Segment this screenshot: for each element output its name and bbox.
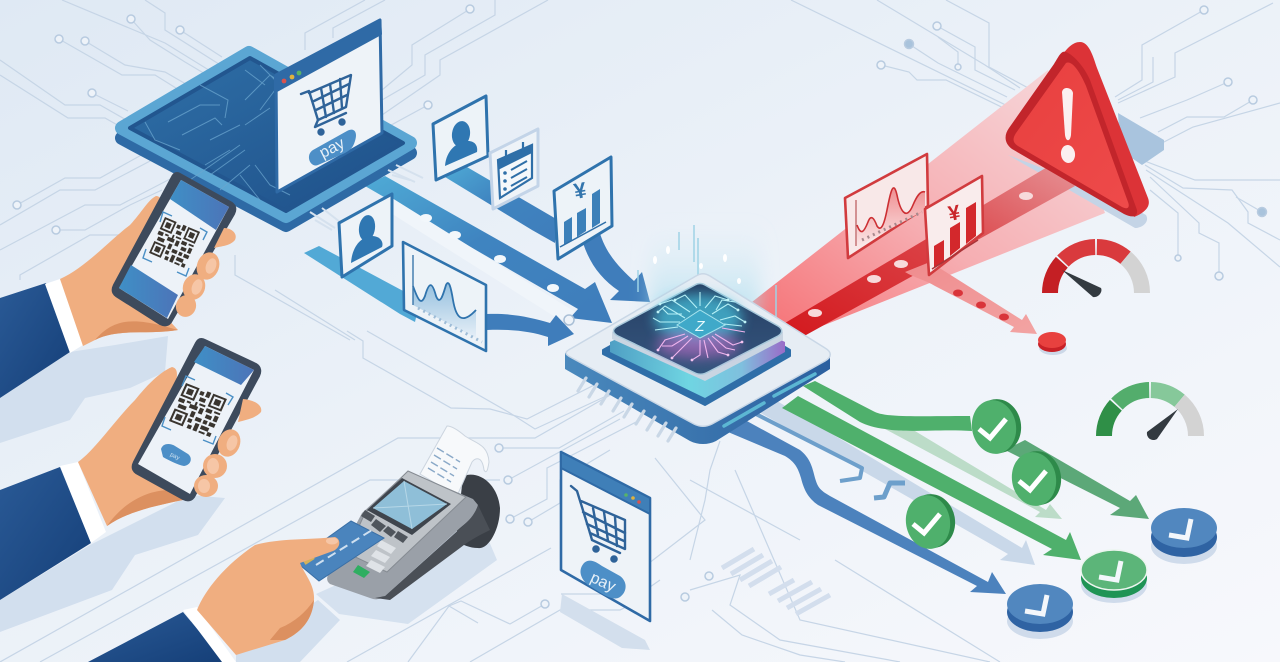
- top face: [614, 284, 782, 374]
- QR code: [169, 383, 227, 437]
- chip base: [565, 353, 830, 444]
- data platform: [122, 53, 410, 225]
- check badge upper: [968, 395, 1025, 457]
- cuff: [183, 607, 236, 662]
- sleeve: [0, 283, 70, 398]
- red chart card: [845, 154, 928, 258]
- finger: middle: [214, 426, 244, 460]
- button: pay: pay: [317, 135, 348, 162]
- AI chip: [565, 225, 830, 444]
- QR code: [149, 217, 200, 268]
- scan corners: [143, 212, 207, 276]
- icon card: person upper: [433, 96, 488, 180]
- core square: [677, 310, 725, 338]
- screen: [373, 481, 447, 529]
- pins: [578, 378, 676, 441]
- side slots: [724, 374, 815, 426]
- icon card: yen bar chart: [554, 157, 612, 259]
- green path lower: [782, 396, 1081, 560]
- red speed gauge: [1042, 239, 1150, 297]
- pale blue path: [752, 398, 1035, 565]
- hatch stripes: [722, 549, 830, 614]
- green speed gauge: [1096, 382, 1204, 440]
- icon card: yen bar chart: ¥: [572, 177, 589, 204]
- warning triangle: [1006, 42, 1149, 217]
- red main band: [785, 163, 1075, 340]
- needle: [1062, 270, 1101, 297]
- finger: little: [173, 292, 199, 320]
- blue path: [728, 420, 1006, 594]
- stream: main band with dots: [365, 176, 612, 325]
- red risk beam: [752, 70, 1105, 340]
- red yen card: [925, 176, 983, 275]
- sleeve: [0, 467, 91, 600]
- POS shadow: [316, 520, 497, 624]
- squiggle: [874, 483, 905, 498]
- button: small pay: [161, 444, 191, 466]
- receipt: [420, 426, 489, 496]
- connector pins: [310, 165, 423, 230]
- exclamation mark: [1060, 88, 1076, 164]
- screen frame: [367, 478, 451, 535]
- glow column: [650, 225, 760, 315]
- button: pay: [309, 130, 356, 165]
- green key: [353, 565, 370, 578]
- red yen card: ¥: [947, 201, 962, 226]
- finger: ring: [179, 271, 209, 303]
- hand with card: [88, 537, 339, 662]
- paper roll housing: [456, 475, 500, 548]
- thin blue trace: [750, 411, 862, 481]
- cuff: [45, 279, 83, 353]
- button: small pay: pay: [169, 452, 180, 462]
- bank card: [295, 521, 384, 581]
- palm: [78, 367, 192, 526]
- triangle shadow: [1008, 155, 1147, 228]
- puck: blue right: [1151, 508, 1217, 564]
- chart card: line chart: [403, 242, 486, 351]
- neural glow: [654, 294, 742, 342]
- phone: [133, 339, 260, 500]
- AI chip: Z: [694, 318, 705, 335]
- needle: [1147, 409, 1178, 440]
- hand holding phone lower: [0, 339, 261, 600]
- stream: lower band: [304, 246, 574, 346]
- recess: [603, 296, 790, 405]
- icon card: person lower: [339, 194, 392, 277]
- finger: little: [194, 475, 218, 497]
- POS terminal: [327, 426, 500, 600]
- icon: cart: [571, 486, 625, 562]
- finger: middle: [193, 249, 223, 283]
- puck: blue left: [1007, 584, 1073, 639]
- body: [327, 471, 478, 599]
- sleeve: [88, 612, 225, 662]
- palm: [197, 537, 339, 655]
- glowing band: [610, 300, 785, 398]
- outgoing blue and green paths: [728, 381, 1149, 594]
- scan corners: [162, 376, 233, 444]
- keypad: [361, 510, 408, 543]
- red branch arrow and puck: [905, 262, 1067, 355]
- icon: cart: [301, 75, 351, 134]
- green path upper: [803, 381, 972, 431]
- button: pay: [581, 561, 626, 598]
- platform traces: [145, 65, 290, 200]
- button: pay: pay: [588, 569, 618, 596]
- finger: ring: [203, 454, 227, 478]
- phone: [113, 173, 235, 325]
- puck: green: [1081, 550, 1147, 603]
- pale green path: [885, 425, 1062, 519]
- silver lip: [612, 290, 783, 381]
- window: cart and pay lower: [560, 452, 650, 650]
- cuff: [60, 462, 106, 543]
- icon card: calendar: [490, 129, 538, 209]
- stream: user band: [445, 163, 650, 302]
- check badge middle: [1008, 447, 1065, 509]
- circuit board under warning: [1118, 113, 1164, 165]
- hand holding phone upper: [0, 173, 236, 398]
- palm: [60, 196, 178, 346]
- incoming data streams: [304, 163, 650, 346]
- check badge lower: [902, 490, 959, 552]
- hand shadows: [0, 336, 340, 662]
- finger: top: [214, 228, 236, 248]
- neural traces: [653, 292, 745, 330]
- finger: top: [238, 399, 261, 422]
- window: cart and pay: [275, 20, 382, 192]
